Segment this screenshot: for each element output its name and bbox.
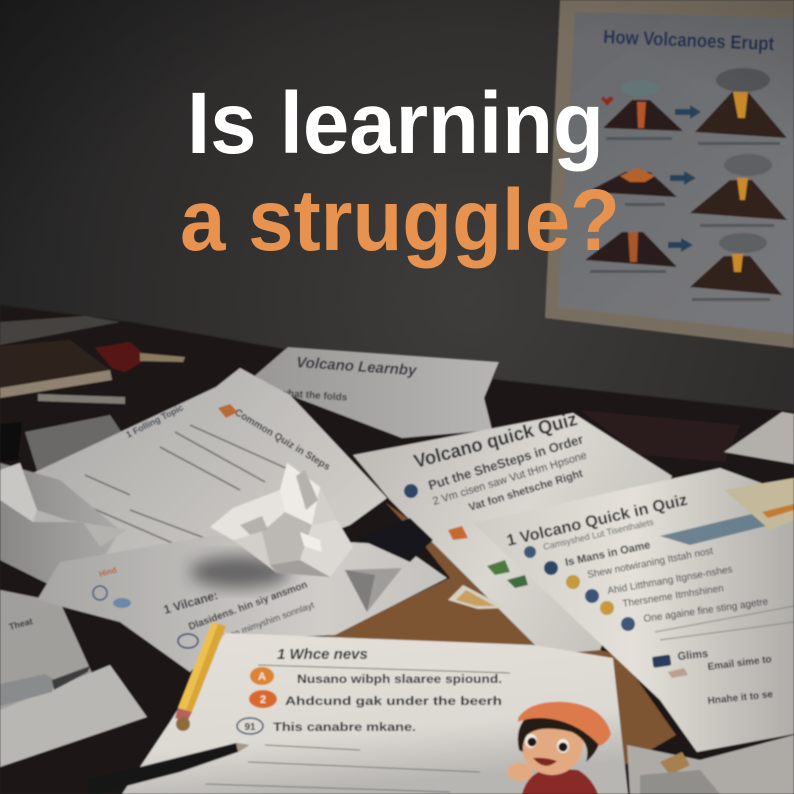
- small folded paper corner: [345, 568, 402, 612]
- paper: Volcano Quick in Quiz right: Ahid Litthmang Itgnse-nshes: [607, 564, 733, 597]
- paper: Volcano quick Quiz: 2 Vm cisen saw Vut tHm Hpsone: [431, 449, 588, 508]
- paper: back worksheet Volcano Learn: [250, 347, 499, 438]
- volcano row 2: [587, 154, 787, 220]
- dark notebook on desk: [357, 518, 433, 562]
- brown wooden desk patch: [320, 502, 676, 765]
- crumpled paper ball: [210, 463, 353, 577]
- arrow: [675, 105, 701, 119]
- paper: Volcano Quick in Quiz right: Email sime to: [707, 654, 772, 673]
- cartoon boy illustration: [507, 702, 611, 794]
- hair: [518, 714, 600, 762]
- paper: Volcano Quick in Quiz right: Thersneme Itmhshinen: [622, 583, 724, 610]
- poster captions: [590, 137, 780, 301]
- paper: Volcano Quick in Quiz right: 1 Volcano Quick in Quiz: [505, 492, 689, 550]
- title: [180, 75, 620, 269]
- hand: [507, 763, 533, 781]
- worksheet heading: 1 Whce nevs: [277, 646, 368, 663]
- paper: Volcano Quick in Quiz right: One againe fine sting agetre: [643, 597, 769, 625]
- paper: left large worksheet: 1 Folling Topic: [124, 402, 185, 440]
- arrow: [668, 238, 693, 252]
- eyes: [525, 734, 537, 748]
- orange badge: [218, 404, 238, 418]
- shirt: [522, 768, 598, 794]
- arrow: [670, 171, 696, 185]
- paper: Volcano Quick in Quiz right: Glims: [677, 648, 709, 663]
- title line: Is learning: Is learning: [187, 75, 604, 172]
- paper: left large worksheet: Common Quiz in Steps: [232, 407, 332, 473]
- framed poster: How Volcanoes Erupt: [545, 0, 794, 348]
- title line: a struggle?: a struggle?: [180, 172, 620, 269]
- paper: Volcano quick Quiz: Volcano quick Quiz: [412, 409, 580, 473]
- small tan note: [448, 585, 507, 609]
- paper: left large worksheet: [33, 368, 387, 585]
- answer line two: 2: [260, 694, 266, 706]
- paper: centre worksheet: [37, 535, 447, 672]
- answer line two: Ahdcund gak under the beerh: [285, 694, 502, 708]
- paper: Volcano Quick in Quiz right: [473, 468, 794, 752]
- paper: Volcano Quick in Quiz right: Shew notwiraning Itstah nost: [586, 546, 714, 581]
- volcano row 3: [585, 232, 782, 295]
- poster title: How Volcanoes Erupt: [603, 27, 775, 55]
- crumpled paper at left: [0, 463, 127, 547]
- shadow under crumpled ball: [190, 556, 290, 588]
- paper: back worksheet Volcano Learn: what the folds: [279, 388, 348, 404]
- paper: centre worksheet: Hind: [98, 565, 118, 579]
- grey pen on left: [0, 666, 90, 706]
- background wall: [0, 0, 794, 430]
- paper: Volcano Quick in Quiz right: Camsyshed Lut Tisenthalets: [542, 517, 655, 552]
- paper: Volcano quick Quiz: [353, 409, 672, 655]
- answer line three: 91: [244, 722, 256, 733]
- paper: centre worksheet: Dlasidens. hin siy ansmon: [187, 580, 309, 633]
- answer line one: [250, 667, 502, 686]
- paper: right top corner: [724, 412, 794, 464]
- answer line one: Nusano wibph slaaree spiound.: [297, 672, 502, 686]
- paper: Volcano quick Quiz: Put the SheSteps in Order: [426, 431, 585, 493]
- cap: [518, 702, 611, 746]
- mouth: [533, 758, 557, 766]
- face: [521, 713, 583, 775]
- answer line one: A: [258, 671, 266, 683]
- dark desk surface: [0, 305, 794, 794]
- books at left of desk: [0, 316, 185, 480]
- paper: centre worksheet: Dan mimyshim sonnlayt: [222, 600, 316, 642]
- paper: Volcano Quick in Quiz right: Is Mans in Oame: [564, 539, 652, 569]
- yellow pencil: [175, 622, 226, 731]
- answer line three: [237, 718, 416, 734]
- paper: Volcano quick Quiz: Vat fon shetsche Right: [467, 468, 585, 514]
- dark maroon shadow behind papers: [580, 410, 740, 462]
- paper: far left stack: [0, 463, 147, 767]
- paper: Volcano Quick in Quiz right: Hnahe it to se: [707, 689, 774, 707]
- answer line three: This canabre mkane.: [273, 720, 416, 734]
- paper: far left stack: Theat: [8, 616, 34, 632]
- volcano row 1: [601, 68, 787, 138]
- paper: centre worksheet: 1 Vilcane:: [162, 588, 219, 617]
- paper: front worksheet: [122, 633, 628, 794]
- paper: back worksheet Volcano Learn: Volcano Learnby: [296, 354, 418, 379]
- black pen: [88, 743, 249, 794]
- answer line two: [249, 690, 502, 708]
- paper stack bottom right: [627, 735, 794, 794]
